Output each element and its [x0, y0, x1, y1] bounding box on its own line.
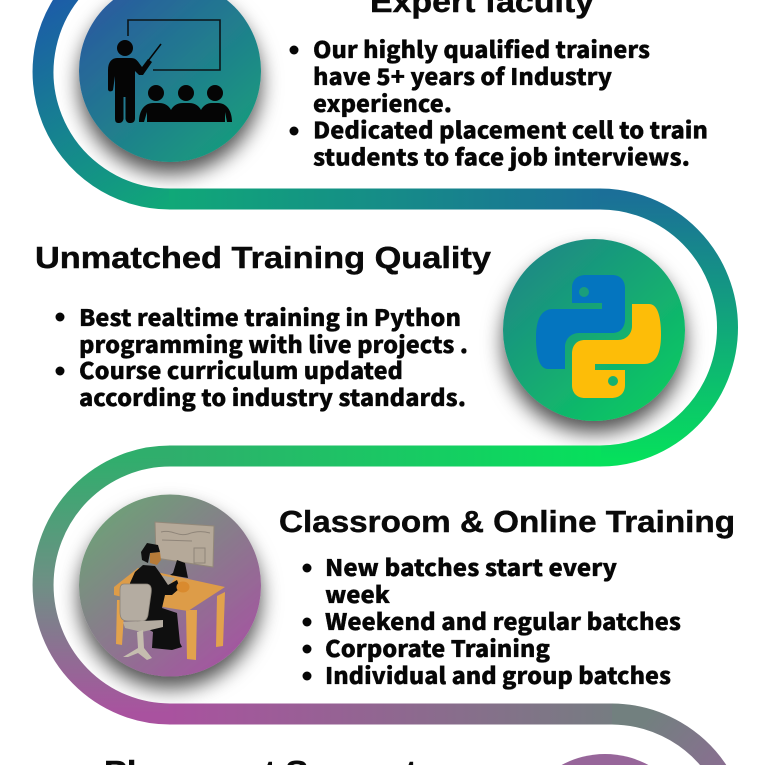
- text block: quality bullets: Best realtime training in Python: [79, 299, 461, 333]
- text block: classroom bullets: Weekend and regular batches: [325, 603, 681, 637]
- text block: classroom bullets: Corporate Training: [325, 630, 550, 664]
- text block: faculty bullets: Dedicated placement cell to train: [313, 112, 708, 146]
- text block: faculty bullets: experience.: [313, 85, 452, 119]
- icon: teacher and students: [79, 0, 261, 162]
- text block: quality bullets: Course curriculum updated: [79, 352, 403, 386]
- heading: classroom and online training: Classroom & Online Training: [279, 505, 735, 539]
- text block: faculty bullets: [290, 31, 708, 172]
- panel: expert faculty: [79, 0, 708, 172]
- icon: person at computer desk: [79, 494, 261, 676]
- text block: classroom bullets: week: [325, 576, 390, 610]
- text block: quality bullets: [56, 299, 468, 413]
- text block: faculty bullets: students to face job interviews.: [313, 138, 690, 172]
- text block: classroom bullets: New batches start every: [325, 549, 617, 583]
- panel: placement support: [104, 754, 648, 765]
- icon: placement circle: [562, 754, 648, 765]
- text block: quality bullets: according to industry standards.: [79, 379, 466, 413]
- icon: python logo: [503, 239, 685, 421]
- heading: training quality: Unmatched Training Quality: [35, 241, 491, 275]
- text block: faculty bullets: have 5+ years of Industry: [313, 58, 612, 92]
- panel: classroom and online training: [79, 494, 735, 691]
- text block: classroom bullets: Individual and group batches: [325, 657, 671, 691]
- text block: quality bullets: programming with live projects .: [79, 326, 468, 360]
- panel: unmatched training quality: [35, 239, 685, 421]
- text block: classroom bullets: [302, 549, 681, 691]
- text block: faculty bullets: Our highly qualified trainers: [313, 31, 650, 65]
